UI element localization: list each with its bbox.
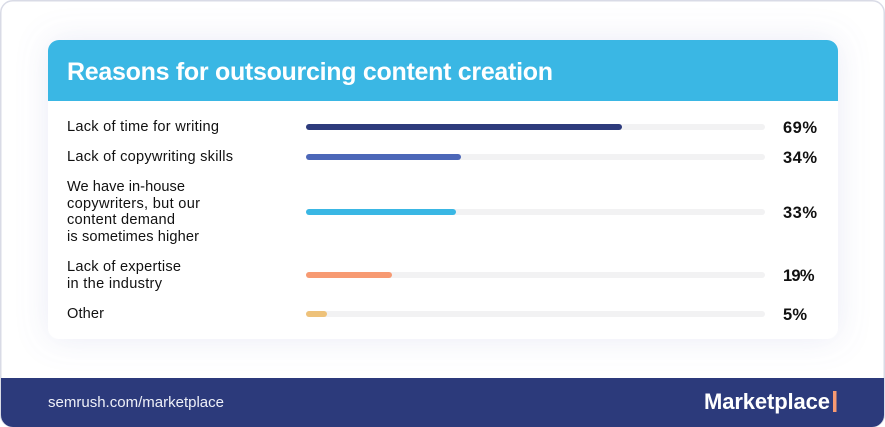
row: lack of expertise: in the industry <box>67 276 163 292</box>
title: Reasons for outsourcing content creation <box>67 58 553 86</box>
row: lack of copywriting skills <box>67 149 817 167</box>
row: other <box>67 306 807 324</box>
row: lack of expertise: Lack of expertise <box>67 259 181 275</box>
row: lack of expertise <box>67 259 815 292</box>
logo: Marketplace: Marketplace <box>704 389 830 414</box>
row: other: 5% <box>783 306 807 324</box>
footer url: semrush.com/marketplace <box>48 394 224 411</box>
row: lack of time: Lack of time for writing <box>67 119 219 135</box>
row: in-house copywriters <box>67 179 817 245</box>
row: lack of time <box>67 119 817 137</box>
row: in-house copywriters: copywriters, but our <box>67 196 200 212</box>
row: lack of copywriting skills: 34% <box>783 149 817 167</box>
row: in-house copywriters: We have in-house <box>67 179 185 195</box>
footer band <box>0 378 885 427</box>
row: in-house copywriters: 33% <box>783 204 817 222</box>
row: other: Other <box>67 306 104 322</box>
row: lack of copywriting skills: Lack of copywriting skills <box>67 149 233 165</box>
row: lack of time: 69% <box>783 119 817 137</box>
row: in-house copywriters: content demand <box>67 212 175 228</box>
card header band <box>48 40 838 101</box>
row: in-house copywriters: is sometimes higher <box>67 229 199 245</box>
row: lack of expertise: 19% <box>783 267 815 285</box>
panel: survey card <box>48 40 838 339</box>
